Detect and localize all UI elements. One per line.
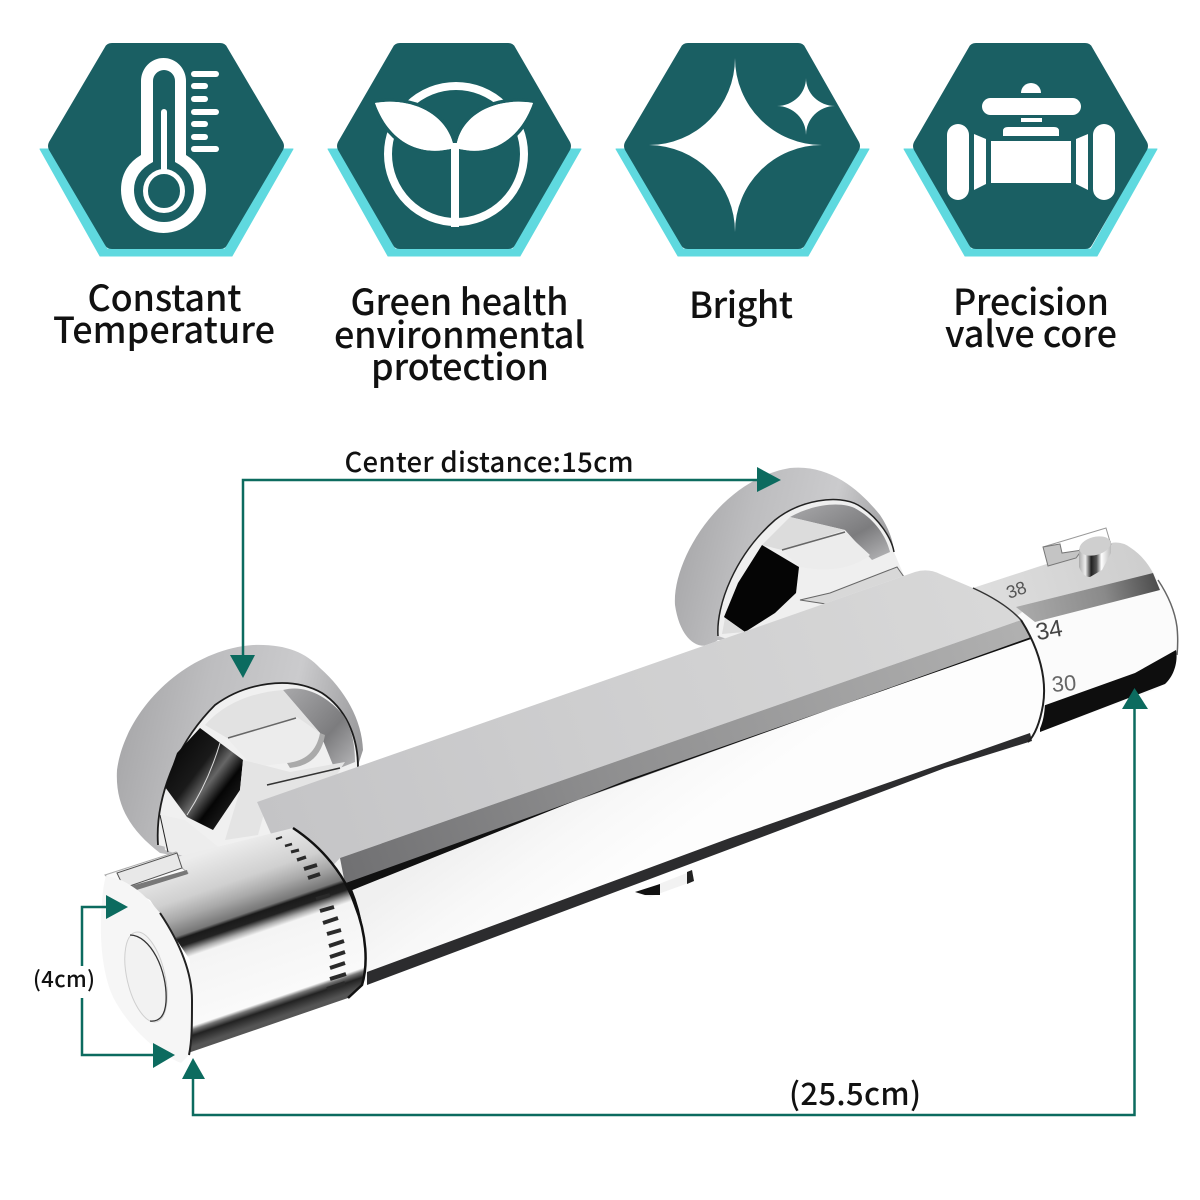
heading: bright: Bright [689,277,793,329]
dimension: length 25.5cm [182,688,1148,1115]
panel: constant temperature [40,43,293,354]
scale numbers: 38 [1004,577,1029,603]
bottom shadow edge [367,733,1032,985]
scale numbers: 34 [1034,615,1065,646]
panel: precision valve core [904,43,1157,358]
wall mount: rear [675,468,905,646]
dimension: center distance 15cm: Center distance:15cm [344,440,634,480]
heading: precision valve core: valve core [945,306,1117,358]
heading: green health environmental protection: protection [371,339,549,391]
dial end face [101,876,192,1063]
wall mount: front [117,645,363,860]
outlet nozzle [635,870,694,897]
icon: valve hexagon [904,43,1157,256]
left temperature dial [101,828,366,1063]
dial tick marks [276,837,346,989]
arrowheads [106,895,175,1068]
icon: thermometer hexagon [40,43,293,256]
heading: precision valve core: Precision [953,274,1109,326]
icon: sparkle hexagon [616,43,869,256]
dimension: center distance 15cm [230,440,781,678]
icon: sprout in circle hexagon [328,43,581,256]
top flat surface [257,570,1021,900]
heading: constant temperature: Temperature [53,302,275,354]
dimension: diameter 4cm [33,895,175,1068]
heading: green health environmental protection: Green health [350,274,568,326]
heading: green health environmental protection: environmental [334,307,585,359]
grey reflection band [340,620,1031,884]
arrowhead: down [230,655,255,678]
dial slot [105,852,188,893]
right control cap [973,528,1178,732]
scale numbers [1004,577,1077,697]
heading: constant temperature: Constant [88,270,242,322]
product: thermostatic valve [101,468,1178,1063]
dimension: length 25.5cm: (25.5cm) [789,1069,921,1114]
scale numbers: 30 [1051,670,1077,697]
dial push button [117,928,175,1026]
arrowheads [182,688,1148,1079]
panel: green health [328,43,585,391]
dimension: diameter 4cm: (4cm) [33,962,95,994]
panel: bright [616,43,869,329]
main body bar [257,570,1045,990]
